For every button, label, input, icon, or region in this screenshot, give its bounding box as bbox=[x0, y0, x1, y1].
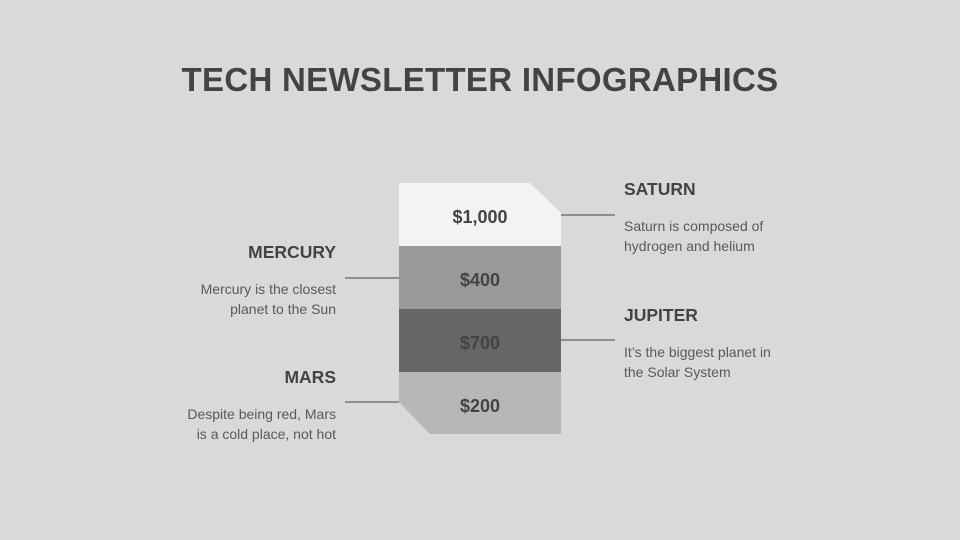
block: $200 bbox=[399, 372, 561, 434]
text: saturn: SATURN bbox=[624, 179, 696, 199]
block: $1,000: $1,000 bbox=[452, 207, 508, 227]
text: mars: Despite being red, Mars bbox=[187, 406, 336, 422]
text: mercury bbox=[201, 242, 336, 317]
text: mercury: planet to the Sun bbox=[230, 301, 336, 317]
text: jupiter: It’s the biggest planet in bbox=[624, 344, 771, 360]
block: $200: $200 bbox=[460, 396, 500, 416]
text: saturn: Saturn is composed of bbox=[624, 218, 763, 234]
text: mars: MARS bbox=[284, 367, 336, 387]
text: mercury: Mercury is the closest bbox=[201, 281, 336, 297]
text: saturn: hydrogen and helium bbox=[624, 238, 755, 254]
text: mars bbox=[187, 367, 336, 442]
title: TECH NEWSLETTER INFOGRAPHICS bbox=[182, 61, 778, 98]
block: $700 bbox=[399, 309, 561, 372]
text: jupiter: JUPITER bbox=[624, 305, 698, 325]
text: jupiter: the Solar System bbox=[624, 364, 731, 380]
text: jupiter bbox=[624, 305, 771, 380]
text: mercury: MERCURY bbox=[248, 242, 336, 262]
text: saturn bbox=[624, 179, 764, 254]
block: $700: $700 bbox=[460, 333, 500, 353]
block: $400: $400 bbox=[460, 270, 500, 290]
text: mars: is a cold place, not hot bbox=[197, 426, 336, 442]
block: $1,000 bbox=[399, 183, 561, 246]
block: $400 bbox=[399, 246, 561, 309]
